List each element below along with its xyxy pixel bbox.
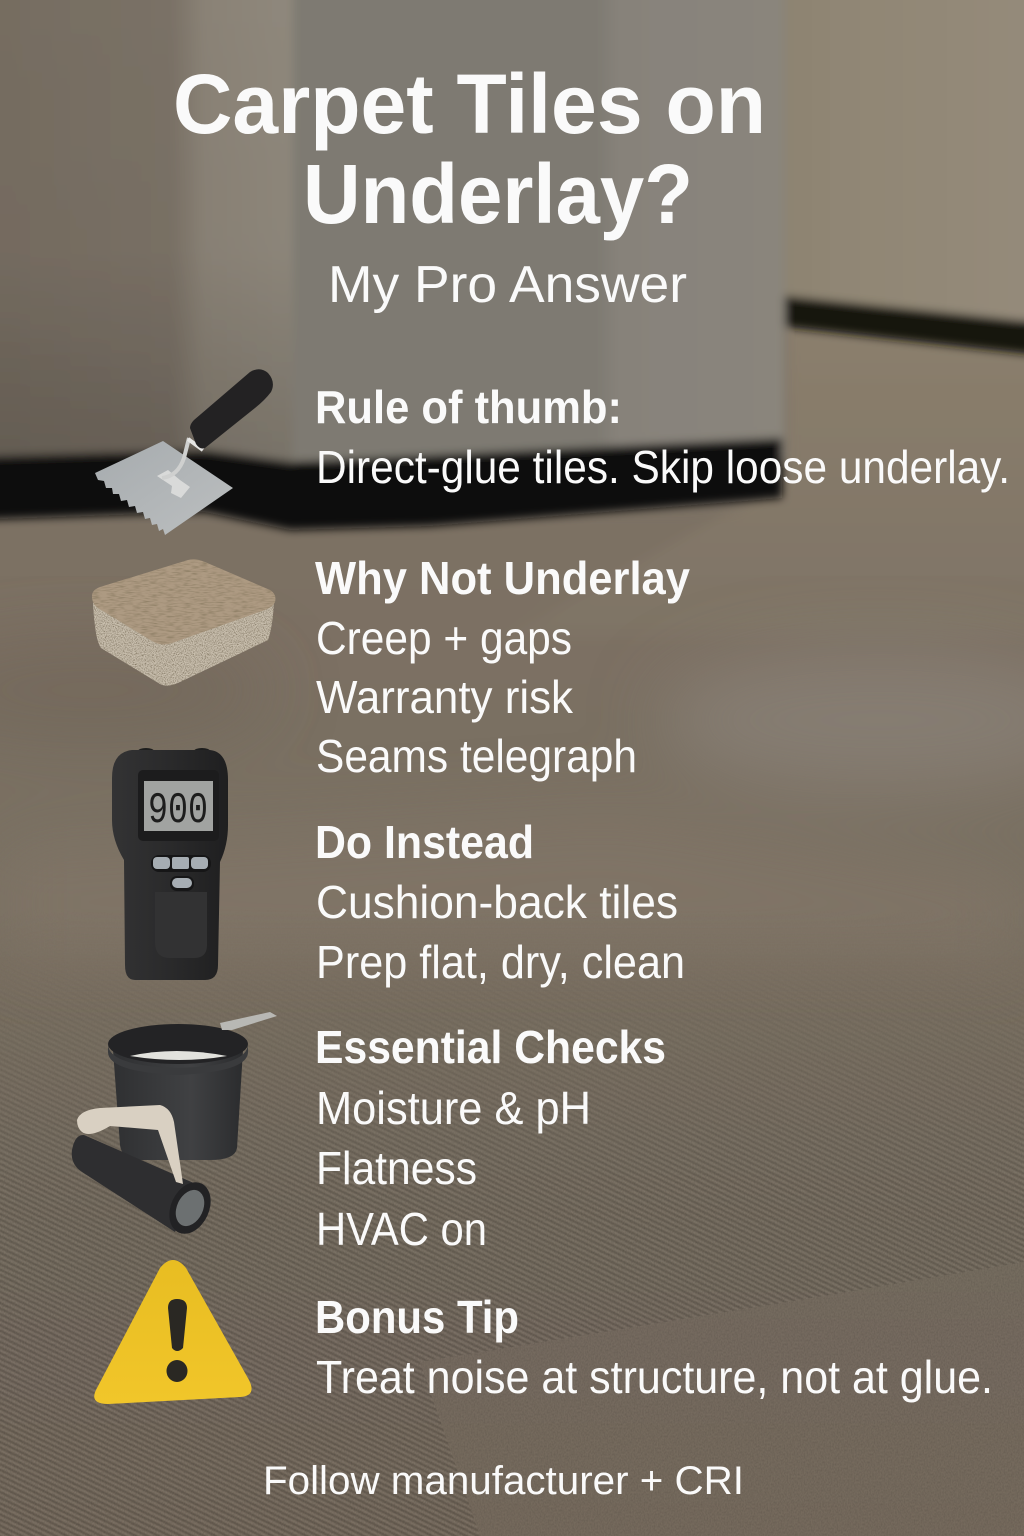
icon: underlay foam block — [92, 559, 275, 686]
icon: moisture meter — [112, 748, 228, 980]
section: why not underlay — [315, 552, 690, 782]
list: checks: HVAC on — [316, 1203, 487, 1255]
list: alternatives: Cushion-back tiles — [316, 876, 678, 928]
list: reasons — [316, 612, 637, 782]
roller — [72, 1105, 219, 1240]
title: Carpet Tiles on — [173, 57, 766, 151]
section: do instead — [315, 816, 685, 988]
icon: adhesive pot and roller — [72, 1012, 277, 1240]
list: reasons: Seams telegraph — [316, 730, 637, 782]
list: checks: Moisture & pH — [316, 1082, 591, 1134]
heading: essential checks: Essential Checks — [315, 1021, 666, 1073]
icon: notched trowel — [95, 369, 273, 535]
title: Underlay? — [303, 147, 693, 241]
icon: warning triangle — [94, 1260, 252, 1404]
heading: rule of thumb: Rule of thumb: — [315, 381, 622, 433]
list: checks — [316, 1082, 591, 1255]
heading: bonus tip: Bonus Tip — [315, 1291, 519, 1343]
list: checks: Flatness — [316, 1142, 477, 1194]
text: treat noise: Treat noise at structure, not at glue. — [316, 1351, 993, 1403]
pot — [108, 1012, 277, 1160]
list: reasons: Warranty risk — [316, 671, 574, 723]
subtitle: My Pro Answer — [328, 256, 687, 314]
section: essential checks — [315, 1021, 666, 1255]
list: reasons: Creep + gaps — [316, 612, 572, 664]
heading: why not underlay: Why Not Underlay — [315, 552, 690, 604]
heading: do instead: Do Instead — [315, 816, 534, 868]
footer: Follow manufacturer + CRI — [263, 1459, 744, 1503]
list: alternatives: Prep flat, dry, clean — [316, 936, 685, 988]
title — [173, 57, 766, 241]
section: bonus tip — [315, 1291, 993, 1403]
section: rule of thumb — [315, 381, 1010, 493]
list: alternatives — [316, 876, 685, 988]
meter reading: 900 — [148, 786, 208, 836]
